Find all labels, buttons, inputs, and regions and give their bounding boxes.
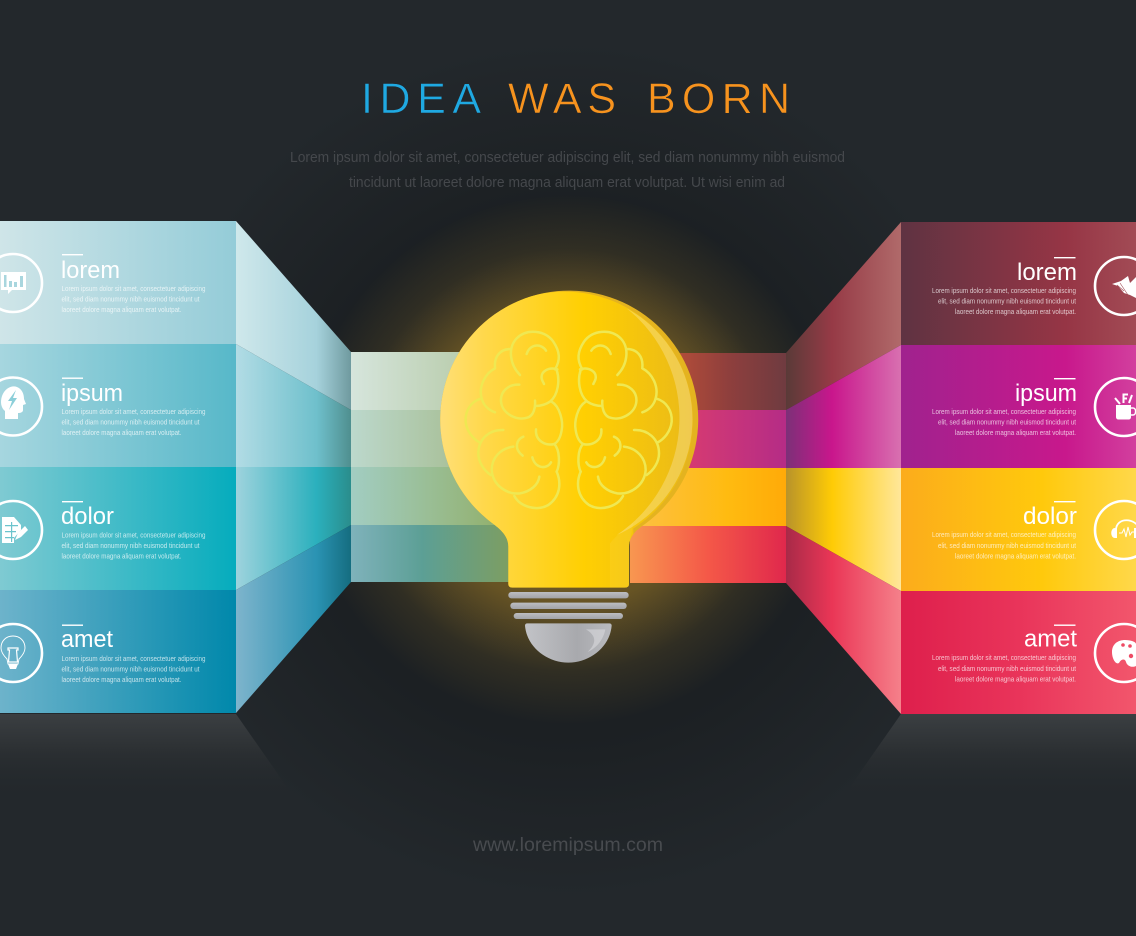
heading: ipsum: ipsum <box>1015 380 1077 407</box>
bulb screw threads <box>508 592 629 619</box>
text: amet body: Lorem ipsum dolor sit amet, consectetuer adipiscing <box>62 654 206 663</box>
text: dolor body: elit, sed diam nonummy nibh euismod tincidunt ut <box>938 541 1076 550</box>
heading: lorem: lorem <box>61 257 120 284</box>
back wall bands: left <box>351 352 511 582</box>
side walls: right <box>786 222 901 714</box>
text: lorem body: laoreet dolore magna aliquam erat volutpat. <box>62 305 182 314</box>
panel: left ipsum <box>0 344 236 467</box>
text: lorem body <box>932 286 1076 316</box>
panel: right amet <box>901 591 1136 714</box>
light bulb with brain <box>436 291 698 663</box>
text: lorem body: elit, sed diam nonummy nibh euismod tincidunt ut <box>938 296 1076 306</box>
text: amet body: elit, sed diam nonummy nibh euismod tincidunt ut <box>62 664 200 674</box>
text: dolor body: Lorem ipsum dolor sit amet, consectetuer adipiscing <box>932 530 1076 539</box>
heading: dolor: dolor <box>61 503 114 530</box>
icon: headphones <box>1095 501 1136 559</box>
panel: left lorem <box>0 221 236 344</box>
text: dolor body <box>62 530 206 560</box>
text: ipsum body: laoreet dolore magna aliquam erat volutpat. <box>955 428 1076 437</box>
panel: right dolor <box>901 468 1136 591</box>
text: amet body: Lorem ipsum dolor sit amet, consectetuer adipiscing <box>932 653 1076 662</box>
text: lorem body: Lorem ipsum dolor sit amet, consectetuer adipiscing <box>62 284 206 293</box>
icon: light bulb <box>0 624 42 682</box>
title: BORN <box>647 75 790 123</box>
text: amet body <box>62 654 206 684</box>
text: lorem body: Lorem ipsum dolor sit amet, consectetuer adipiscing <box>932 286 1076 295</box>
heading: amet: amet <box>1024 626 1077 652</box>
panel: left amet <box>0 590 236 713</box>
bulb glow <box>303 195 833 725</box>
text: ipsum body <box>62 407 206 437</box>
icon: paint palette <box>1095 624 1136 682</box>
text: ipsum body: Lorem ipsum dolor sit amet, consectetuer adipiscing <box>932 407 1076 416</box>
text: amet body: elit, sed diam nonummy nibh euismod tincidunt ut <box>938 664 1076 673</box>
text: ipsum body <box>932 407 1076 437</box>
text: dolor body: laoreet dolore magna aliquam erat volutpat. <box>62 552 182 560</box>
heading: ipsum: ipsum <box>61 380 123 407</box>
title <box>361 75 790 123</box>
bulb cap <box>525 623 612 663</box>
icon: chart speech bubble <box>0 254 42 312</box>
text: dolor body <box>932 530 1076 560</box>
subtitle: tincidunt ut laoreet dolore magna aliquam erat volutpat. Ut wisi enim ad <box>349 174 785 191</box>
panel: right lorem <box>901 222 1136 345</box>
text: amet body: laoreet dolore magna aliquam erat volutpat. <box>955 674 1076 684</box>
heading: dolor: dolor <box>1023 503 1077 530</box>
brain outline <box>466 332 672 508</box>
heading: lorem: lorem <box>1017 259 1077 286</box>
text: amet body <box>932 653 1076 684</box>
floor reflection: right <box>841 714 1136 800</box>
text: dolor body: elit, sed diam nonummy nibh euismod tincidunt ut <box>62 541 200 550</box>
title: WAS <box>508 75 616 123</box>
text: dolor body: Lorem ipsum dolor sit amet, consectetuer adipiscing <box>62 530 206 540</box>
text: ipsum body: elit, sed diam nonummy nibh euismod tincidunt ut <box>62 418 200 426</box>
panel: right ipsum <box>901 345 1136 468</box>
text: ipsum body: elit, sed diam nonummy nibh euismod tincidunt ut <box>938 418 1076 426</box>
text: lorem body <box>62 284 206 314</box>
subtitle <box>290 149 845 191</box>
text: lorem body: laoreet dolore magna aliquam erat volutpat. <box>955 307 1076 316</box>
icon: origami bird <box>1095 257 1136 315</box>
icon: document and pencil <box>0 501 42 559</box>
side walls: left <box>236 221 351 713</box>
text: lorem body: elit, sed diam nonummy nibh euismod tincidunt ut <box>62 294 200 304</box>
title: IDEA <box>361 75 481 123</box>
icon: pencil mug <box>1095 378 1136 436</box>
text: ipsum body: laoreet dolore magna aliquam erat volutpat. <box>62 428 182 437</box>
panel: left dolor <box>0 467 236 590</box>
website footer: www.loremipsum.com <box>472 835 663 856</box>
icon: head with lightning <box>0 378 42 436</box>
subtitle: Lorem ipsum dolor sit amet, consectetuer adipiscing elit, sed diam nonummy nibh euismod <box>290 149 845 166</box>
text: dolor body: laoreet dolore magna aliquam erat volutpat. <box>955 552 1076 560</box>
text: amet body: laoreet dolore magna aliquam erat volutpat. <box>62 675 182 684</box>
heading: amet: amet <box>61 626 113 653</box>
floor reflection: left <box>0 714 296 800</box>
text: ipsum body: Lorem ipsum dolor sit amet, consectetuer adipiscing <box>62 407 206 416</box>
back wall bands: right <box>630 353 786 583</box>
